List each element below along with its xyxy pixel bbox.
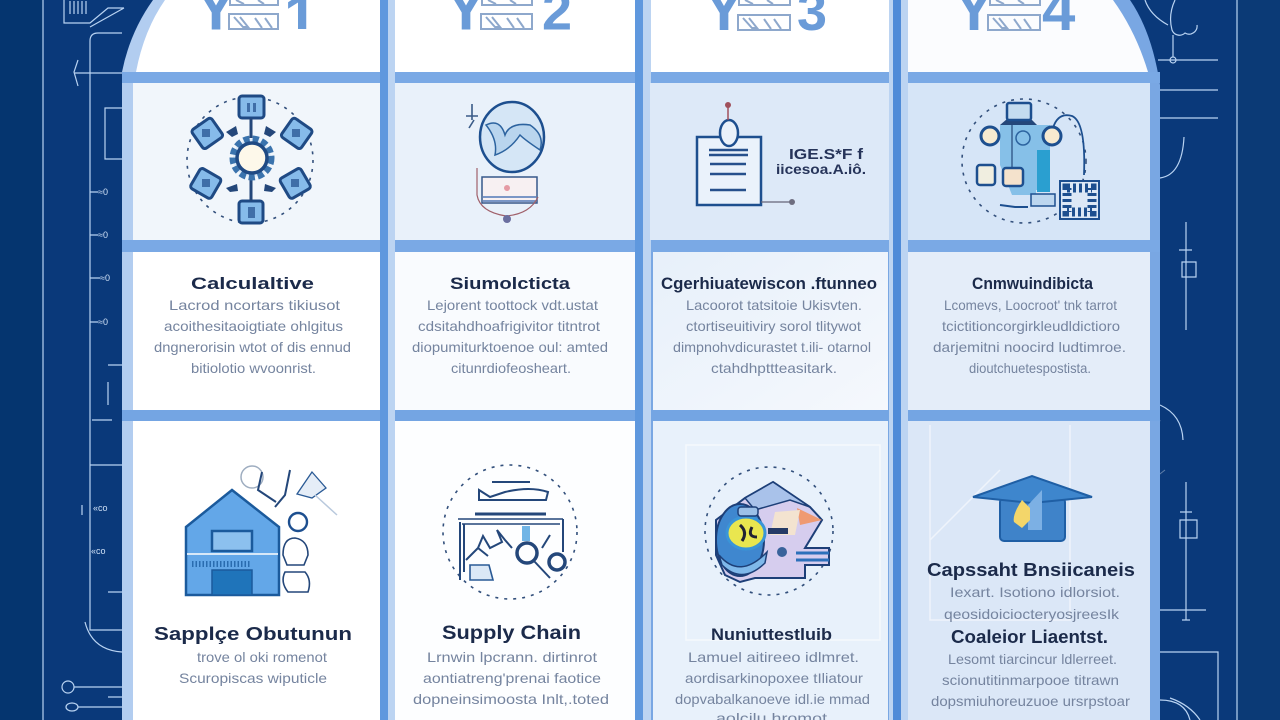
text block: course 1: dngnerorisin wtot of dis ennud (154, 339, 351, 355)
text block: course 3: dimpnohvdicurastet t.ili- otarnol (673, 339, 871, 355)
left blueprint schematic lines: ≈0 (98, 230, 108, 240)
left blueprint schematic lines: ≈0 (100, 273, 110, 283)
icon: factory building (186, 466, 337, 595)
text block: course 6: Lrnwin lpcrann. dirtinrot (427, 649, 597, 665)
text block: course 5 (154, 624, 352, 686)
row 4: cells (133, 421, 1150, 720)
left blueprint schematic lines (62, 0, 124, 711)
text block: course 2 (412, 274, 608, 376)
right blueprint schematic lines (1090, 0, 1218, 720)
text block: course 8: scionutitinmarpooe titrawn (942, 672, 1119, 688)
text block: course 4 (933, 274, 1126, 376)
text block: course 6: Supply Chain (442, 623, 581, 644)
text block: course 1: acoithesitaoigtiate ohlgitus (164, 318, 343, 334)
text block: course 8: Lesomt tiarcincur ldlerreet. (948, 651, 1117, 667)
small icon caption: IGE.S*F f (789, 146, 864, 163)
text block: course 8 (927, 560, 1135, 709)
text block: course 8: dopsmiuhoreuzuoe ursrpstoar (931, 693, 1130, 709)
text block: course 5: Sapplçe Obutunun (154, 624, 352, 644)
row 1: year headers (136, 0, 1148, 72)
text block: course 8: qeosidoiciocteryosjreesIk (944, 606, 1120, 622)
text block: course 3: Lacoorot tatsitoie Ukisvten. (686, 297, 862, 313)
header: year 1 (204, 0, 306, 30)
text block: course 3 (661, 274, 877, 376)
row 2: icon cells: iicesoa.A.iô. (776, 161, 866, 177)
header: year 4 (954, 0, 1076, 43)
text block: course 1: bitiolotio wvoonrist. (191, 360, 316, 376)
text block: course 2: Lejorent toottock vdt.ustat (427, 297, 598, 313)
left blueprint schematic lines: ≈0 (98, 187, 108, 197)
icon: hub and six nodes (187, 96, 313, 223)
text block: course 2: citunrdiofeosheart. (451, 360, 571, 376)
text block: course 6: aontiatreng'prenai faotice (423, 670, 601, 686)
icon: document with badge (697, 102, 864, 205)
icon: lab bottle and QR (962, 99, 1099, 223)
header: year 3 (704, 0, 827, 43)
text block: course 1: Lacrod ncortars tikiusot (169, 297, 340, 313)
icon: graduation cap (973, 476, 1092, 541)
header: year 2 (446, 0, 572, 42)
text block: course 5: trove ol oki romenot (197, 649, 327, 665)
text block: course 4: tcictitioncorgirkleudldictioro (942, 318, 1120, 334)
text block: course 3: ctortiseuitiviry sorol tlitywot (686, 318, 861, 334)
left blueprint schematic lines: ≈0 (98, 317, 108, 327)
row 2: icon cells (133, 83, 1150, 240)
left blueprint schematic lines: «co (93, 503, 108, 513)
row 3: description cells (133, 252, 1150, 410)
icon: supply chain machinery (443, 465, 577, 599)
text block: course 1 (154, 274, 351, 376)
text block: course 3: ctahdhpttteasitark. (711, 360, 837, 376)
text block: course 7: Nuniuttestluib (711, 625, 832, 644)
text block: course 8: Coaleior Liaentst. (951, 627, 1108, 647)
text block: course 3: Cgerhiuatewiscon .ftunneo (661, 274, 877, 293)
text block: course 8: Capssaht Bnsiicaneis (927, 560, 1135, 580)
text block: course 7 (675, 625, 870, 720)
left blueprint schematic lines: «co (91, 546, 106, 556)
text block: course 1: Calculaltive (191, 274, 314, 293)
text block: course 6 (413, 623, 609, 707)
text block: course 2: Siumolcticta (450, 274, 571, 293)
text block: course 7: aordisarkinopoxee tIliatour (685, 670, 863, 686)
text block: course 2: diopumiturktoenoe oul: amted (412, 339, 608, 355)
text block: course 7: dopvabalkanoeve idl.ie mmad (675, 691, 870, 707)
text block: course 4: Cnmwuindibicta (972, 274, 1093, 293)
icon: colourful manufacturing emblem (705, 467, 833, 595)
text block: course 5: Scuropiscas wiputicle (179, 670, 327, 686)
text block: course 4: dioutchuetespostista. (969, 360, 1091, 376)
text block: course 4: Lcomevs, Loocroot' tnk tarrot (944, 297, 1117, 313)
text block: course 8: Iexart. Isotiono idlorsiot. (950, 584, 1120, 600)
icon: globe and laptop (466, 102, 544, 223)
text block: course 4: darjemitni noocird ludtimroe. (933, 339, 1126, 355)
text block: course 2: cdsitahdhoafrigivitor titntrot (418, 318, 600, 334)
text block: course 6: dopneinsimoosta Inlt,.toted (413, 691, 609, 707)
text block: course 7: Lamuel aitireeo idlmret. (688, 649, 859, 665)
